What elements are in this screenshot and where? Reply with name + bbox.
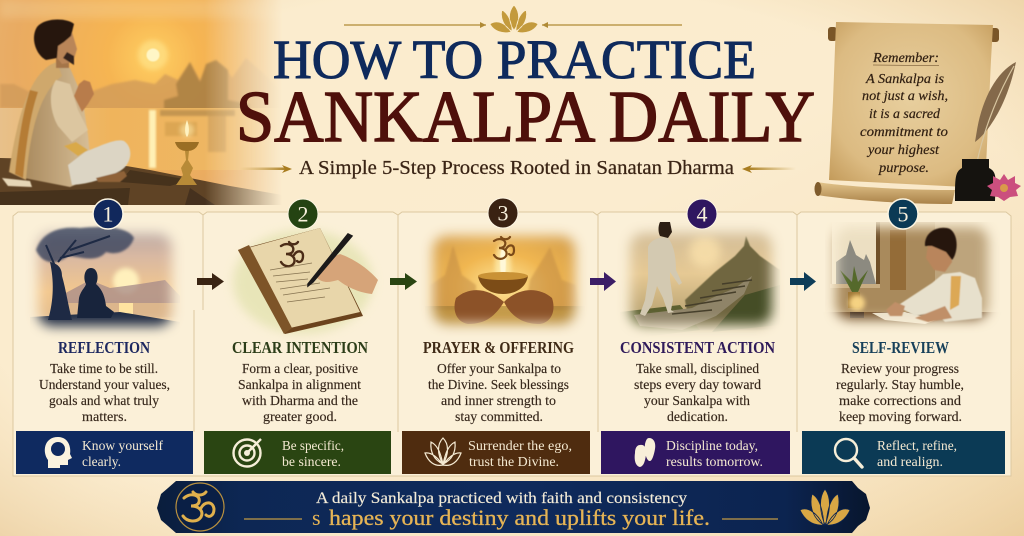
scroll text: A Sankalpa is — [865, 72, 945, 87]
walking man — [640, 222, 682, 316]
step number 2 — [288, 199, 318, 229]
scroll text: Remember: — [872, 51, 939, 66]
panel: step 1 reflection — [16, 220, 193, 474]
description: Sankalpa in alignment — [238, 378, 361, 393]
heading: SELF-REVIEW — [852, 338, 949, 357]
arrow 4 — [790, 272, 816, 291]
parchment sheet — [814, 22, 999, 204]
sun — [138, 40, 168, 70]
callout: know yourself: Know yourself — [82, 439, 163, 454]
subtitle with arrows: A Simple 5-Step Process Rooted in Sanatan Dharma — [299, 157, 734, 179]
callout: surrender — [402, 431, 590, 474]
banner om medallion — [176, 483, 224, 531]
panel: step 5 self-review — [802, 222, 1005, 474]
banner text: s — [312, 505, 321, 530]
feather quill — [975, 62, 1016, 162]
illustration: diya held in hands — [424, 227, 584, 334]
banner text — [312, 490, 710, 530]
callout: be specific: be sincere. — [282, 455, 341, 470]
callout: surrender: trust the Divine. — [469, 455, 559, 470]
description: Take small, disciplined — [636, 362, 759, 377]
step number 5 — [888, 199, 918, 229]
description: greater good. — [263, 410, 337, 425]
panel: step 2 clear intention — [204, 228, 391, 474]
banner text: hapes your destiny and uplifts your life. — [329, 505, 710, 530]
step number 5: 5 — [898, 202, 908, 226]
description: dedication. — [667, 410, 728, 425]
heading: PRAYER & OFFERING — [423, 338, 574, 357]
step number 2: 2 — [298, 202, 308, 226]
stone ledge — [0, 158, 300, 205]
description: make corrections and — [839, 394, 961, 409]
description: the Divine. Seek blessings — [428, 378, 569, 393]
description — [428, 362, 569, 425]
scroll text: purpose. — [878, 161, 929, 176]
callout: reflect: and realign. — [877, 455, 943, 470]
scroll text: your highest — [866, 143, 940, 158]
description: matters. — [82, 410, 127, 425]
description: regularly. Stay humble, — [836, 378, 964, 393]
description: goals and what truly — [49, 394, 159, 409]
step number 3: 3 — [498, 200, 508, 226]
description: Review your progress — [841, 362, 959, 377]
lotus flower — [987, 174, 1021, 201]
top ornament: lotus and lines — [344, 5, 682, 33]
callout: know yourself: clearly. — [82, 455, 121, 470]
arrow 2 — [390, 273, 417, 290]
step cards frame — [13, 212, 1011, 476]
callout: surrender: Surrender the ego, — [468, 439, 572, 454]
panel: step 3 prayer and offering — [402, 220, 590, 474]
hero illustration: man praying at sunrise by the lake — [0, 0, 300, 205]
heading: CLEAR INTENTION — [232, 338, 369, 357]
callout: discipline: Discipline today, — [666, 439, 758, 454]
callout: discipline — [601, 431, 790, 474]
step number 1 — [93, 199, 123, 229]
step number 4 — [687, 199, 717, 229]
illustration: man walking up steps to temple — [621, 226, 780, 335]
callout: be specific — [204, 431, 391, 474]
lake water — [0, 108, 257, 170]
heading: REFLECTION — [58, 338, 151, 357]
description: Understand your values, — [39, 378, 170, 393]
description — [39, 362, 170, 425]
oil lamp — [175, 120, 199, 185]
illustration: notebook and writing hand — [233, 228, 378, 334]
scroll text: commitment to — [860, 125, 948, 140]
callout: know yourself — [16, 431, 193, 474]
description: Take time to be still. — [50, 362, 158, 377]
callout: discipline: results tomorrow. — [666, 455, 763, 470]
callout: reflect: Reflect, refine, — [877, 439, 957, 454]
description — [634, 362, 761, 425]
arrow 1 — [197, 273, 224, 290]
description: your Sankalpa with — [644, 394, 750, 409]
treeline and temple silhouettes — [0, 59, 255, 108]
callout: be specific: Be specific, — [282, 439, 344, 454]
scroll text: not just a wish, — [862, 89, 948, 104]
banner text: A daily Sankalpa practiced with faith and consistency — [316, 490, 687, 507]
step number 4: 4 — [696, 202, 708, 226]
tree and meditating figure — [36, 227, 134, 320]
illustration: man writing at desk by window — [827, 222, 996, 329]
description — [238, 362, 361, 425]
banner lotus — [800, 489, 850, 525]
description: and inner strength to — [441, 394, 556, 409]
banner flourishes — [244, 518, 778, 520]
bottom banner — [157, 481, 870, 533]
seated man — [886, 228, 982, 322]
panel: step 4 consistent action — [601, 220, 790, 474]
description: Form a clear, positive — [242, 362, 358, 377]
step number 3 — [488, 198, 518, 228]
man — [2, 19, 130, 187]
callout: reflect — [802, 431, 1005, 474]
om symbol — [494, 237, 514, 259]
arrow 3 — [590, 272, 616, 291]
description — [836, 362, 964, 425]
om symbol — [281, 242, 303, 266]
scroll text: it is a sacred — [869, 107, 941, 122]
description: keep moving forward. — [839, 410, 962, 425]
title: SANKALPA DAILY — [236, 76, 815, 157]
scroll text — [860, 51, 948, 176]
reminder scroll — [814, 22, 1021, 204]
description: stay committed. — [455, 410, 543, 425]
description: with Dharma and the — [242, 394, 358, 409]
description: steps every day toward — [634, 378, 761, 393]
ink bottle — [955, 159, 996, 201]
heading: CONSISTENT ACTION — [620, 338, 776, 357]
title: HOW TO PRACTICE — [273, 29, 756, 90]
title — [236, 29, 815, 157]
step number 1: 1 — [102, 202, 114, 226]
description: Offer your Sankalpa to — [437, 362, 561, 377]
illustration: silhouette meditating under tree — [30, 226, 180, 336]
